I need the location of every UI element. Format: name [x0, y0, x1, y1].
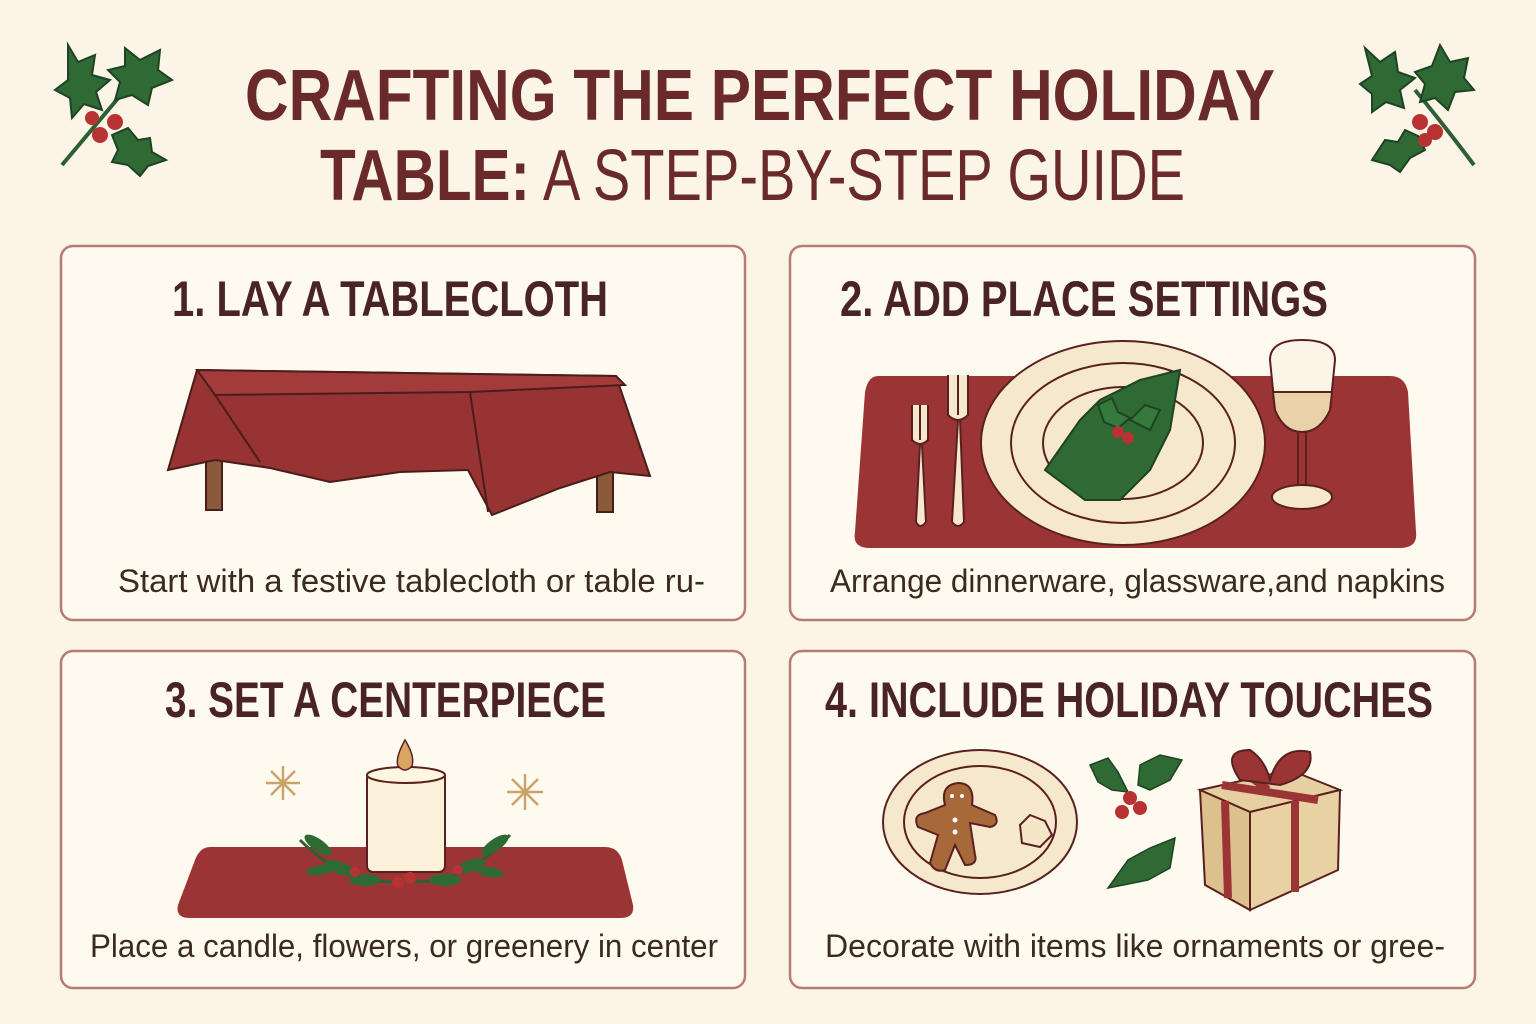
icon: holly sprig: [1090, 755, 1182, 888]
heading 3: 3. SET A CENTERPIECE: [165, 672, 606, 728]
illustration: gingerbread plate: [883, 750, 1077, 894]
illustration: tablecloth: [168, 370, 650, 515]
heading 1: 1. LAY A TABLECLOTH: [172, 271, 608, 327]
panel: set a centerpiece: [61, 651, 745, 988]
title: [245, 56, 1275, 216]
illustration: place setting: [855, 340, 1416, 548]
heading 2: 2. ADD PLACE SETTINGS: [840, 271, 1328, 327]
title: CRAFTING THE PERFECT HOLIDAY: [245, 56, 1275, 136]
panel: include holiday touches: [790, 651, 1475, 988]
title: TABLE:: [320, 136, 530, 216]
caption 2: Arrange dinnerware, glassware,and napkins: [830, 563, 1445, 599]
icon: holly right: [1360, 45, 1474, 172]
caption 4: Decorate with items like ornaments or gree-: [825, 928, 1445, 964]
caption 3: Place a candle, flowers, or greenery in center: [90, 928, 718, 964]
caption 1: Start with a festive tablecloth or table ru-: [118, 563, 705, 599]
illustration: candle centerpiece: [178, 740, 633, 918]
panel: lay a tablecloth: [61, 246, 745, 620]
icon: gift box: [1200, 750, 1340, 910]
panel: add place settings: [790, 246, 1475, 620]
title: A STEP-BY-STEP GUIDE: [543, 136, 1185, 216]
icon: holly left: [55, 45, 172, 176]
